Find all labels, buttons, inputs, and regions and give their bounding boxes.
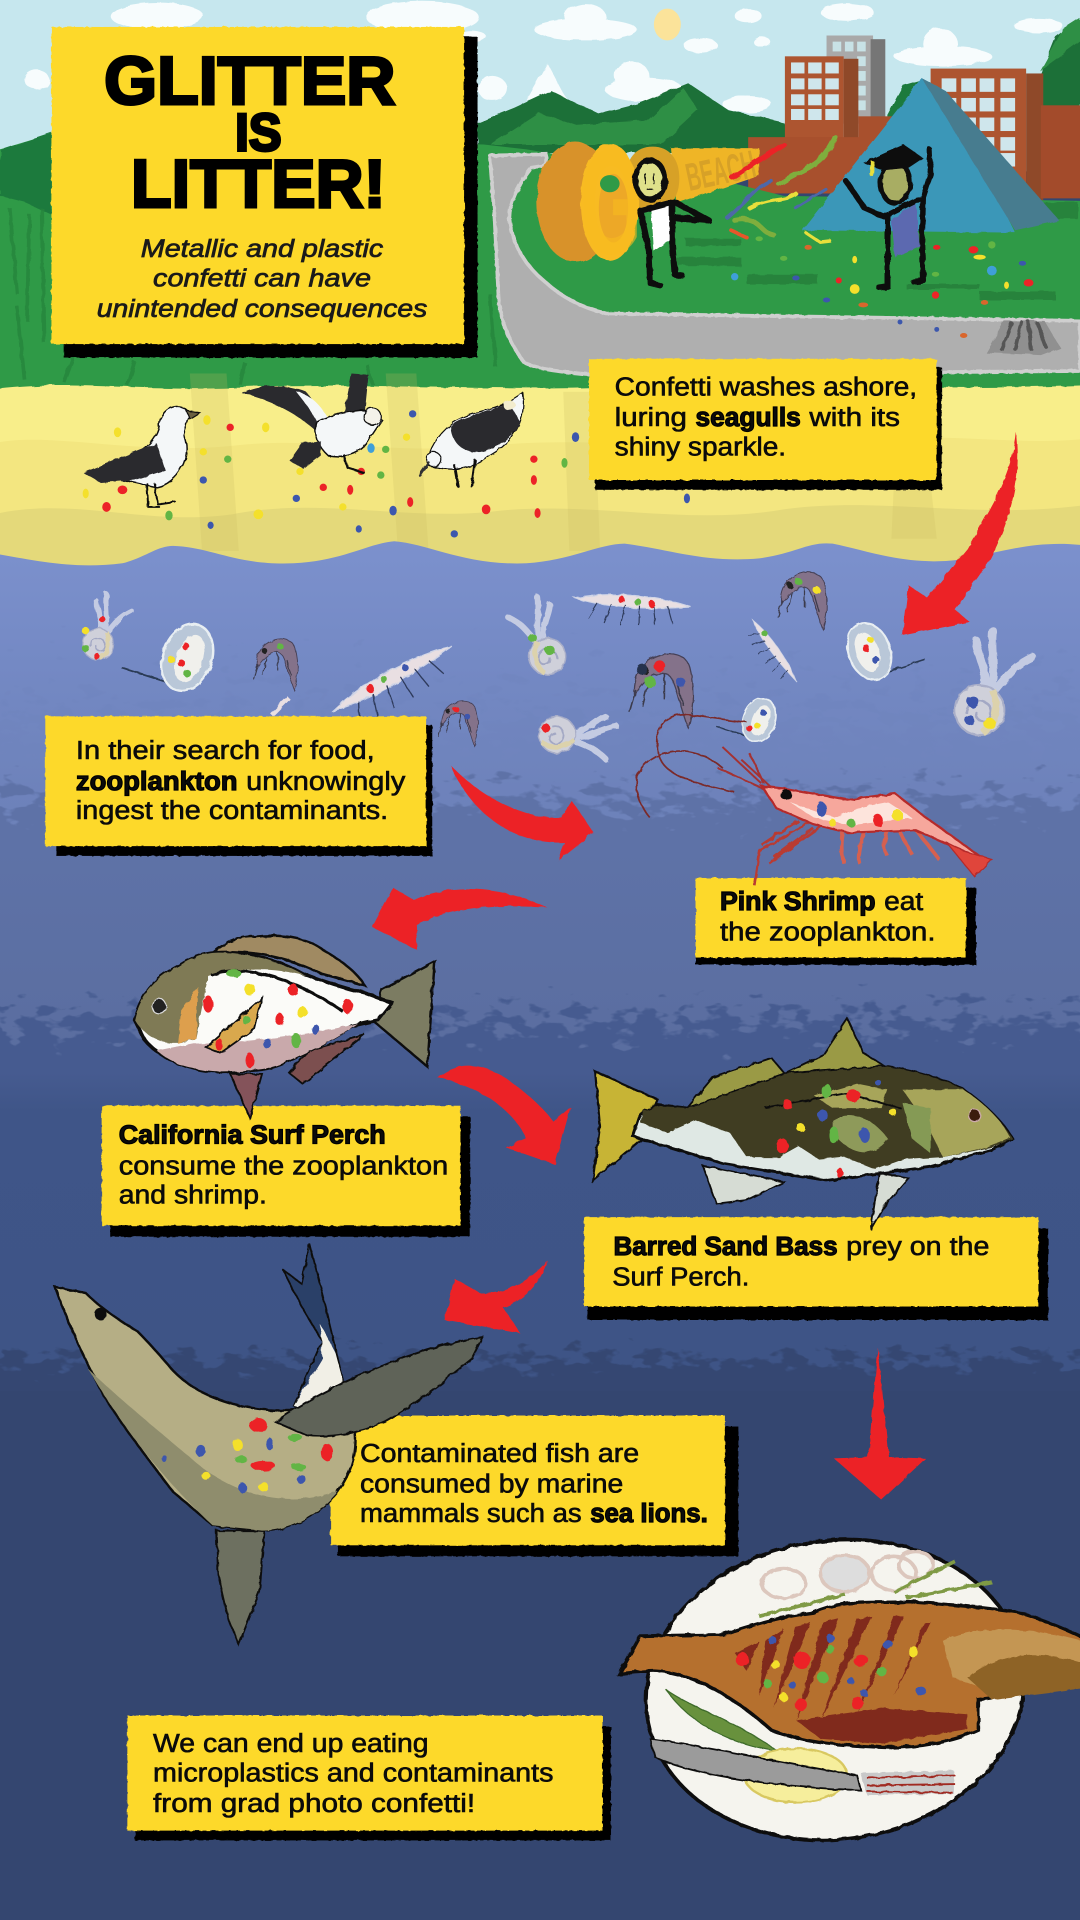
water — [0, 541, 1080, 1920]
rear flipper up — [283, 1244, 345, 1411]
water band 2 solid — [0, 850, 1080, 1073]
arrow: sand to plankton — [902, 432, 1018, 636]
krill 1 — [328, 642, 465, 732]
plate — [626, 1515, 1044, 1864]
water band 4 solid — [0, 1391, 1080, 1920]
person: right stick figure in grad cap — [846, 144, 931, 288]
title: LITTER! — [131, 147, 386, 222]
bass tail — [593, 1071, 658, 1180]
title: IS — [235, 104, 282, 163]
buildings — [748, 36, 1080, 201]
building: grey tower — [827, 36, 885, 125]
callout: zooplankton — [45, 716, 432, 856]
front flipper — [276, 1337, 482, 1436]
arrow: perch to bass — [437, 1066, 571, 1164]
krill 2 — [572, 587, 692, 635]
greens — [666, 1690, 778, 1751]
water mottling 1 — [0, 594, 1080, 851]
small krill fragment — [272, 698, 289, 715]
perch dorsal fin — [213, 936, 365, 986]
bass lower fins — [703, 1166, 784, 1204]
snail plankton 4 — [534, 699, 625, 778]
building: brick right — [931, 69, 1080, 201]
surf perch — [135, 936, 435, 1118]
background: sky — [0, 0, 1080, 171]
callout: humans: microplastics and contaminants — [153, 1760, 553, 1788]
grass background — [0, 135, 1080, 410]
callout: seagulls: Confetti washes ashore, — [615, 374, 917, 402]
callout: sand bass — [584, 1217, 1048, 1320]
callout: zooplankton: unknowingly — [246, 768, 405, 796]
title panel — [51, 27, 478, 358]
arrow: shrimp to perch — [372, 888, 547, 950]
callout: zooplankton: ingest the contaminants. — [76, 797, 388, 825]
road — [490, 154, 1080, 375]
water mottling 3 — [0, 965, 1080, 1075]
oval plankton 1 — [120, 605, 222, 698]
sun — [654, 9, 681, 40]
seagull: pecking — [420, 393, 523, 486]
callout: sand bass: prey on the — [846, 1233, 989, 1261]
subtitle: unintended consequences — [97, 295, 428, 323]
subtitle: Metallic and plastic — [141, 235, 384, 263]
lawn shading stripes — [673, 202, 1078, 300]
title box — [51, 27, 464, 344]
perch pectoral fin — [206, 998, 262, 1053]
tent: blue pyramid — [802, 78, 1059, 233]
zooplankton — [82, 572, 1032, 778]
BEACH letters: BEACH — [682, 143, 760, 200]
callout: sea lions: sea lions. — [590, 1500, 708, 1528]
oval plankton 3 — [716, 686, 782, 746]
arrow: plankton to shrimp — [451, 765, 594, 861]
perch tail — [372, 961, 435, 1067]
perch body — [135, 953, 392, 1072]
big G letter: G — [580, 118, 642, 285]
subtitle — [97, 235, 428, 323]
callout: pink shrimp: the zooplankton. — [720, 918, 936, 946]
bass body — [633, 1067, 1013, 1180]
subtitle: confetti can have — [153, 265, 371, 293]
amphipod 1 — [253, 639, 298, 690]
callout: humans — [127, 1716, 611, 1840]
callout: seagulls — [589, 359, 942, 490]
callout: sea lions: consumed by marine — [360, 1471, 623, 1499]
sand confetti — [83, 410, 690, 538]
perch belly fins — [230, 1074, 262, 1118]
plate of cooked fish — [620, 1515, 1080, 1864]
callout: seagulls: seagulls — [696, 404, 801, 432]
onions — [762, 1551, 933, 1598]
water mottling 4 — [0, 1325, 1080, 1393]
oval plankton 2 — [840, 607, 926, 686]
lawn confetti — [731, 236, 1033, 338]
callout: pink shrimp: eat — [884, 888, 923, 916]
tail flipper down — [217, 1531, 264, 1644]
snail plankton 1 — [82, 594, 131, 660]
callout: surf perch: California Surf Perch — [119, 1122, 386, 1150]
callout: pink shrimp: Pink Shrimp — [720, 888, 876, 916]
callout: surf perch: and shrimp. — [119, 1182, 267, 1210]
title shadow — [64, 37, 478, 358]
callout: sand bass: Surf Perch. — [612, 1264, 749, 1292]
callout: humans: We can end up eating — [153, 1730, 429, 1758]
Go Beach sign — [536, 118, 760, 285]
storm drain — [986, 321, 1060, 355]
person: left stick figure with face — [636, 160, 709, 285]
BEACH backing — [671, 148, 759, 203]
beach sand — [0, 373, 1080, 588]
callout: seagulls: with its — [808, 404, 900, 432]
arrow: bass to plate — [834, 1348, 926, 1500]
shrimp — [636, 715, 992, 885]
callout: surf perch — [102, 1106, 470, 1237]
callout: zooplankton: In their search for food, — [76, 737, 375, 765]
building: brick left — [748, 56, 895, 193]
fork and lemon — [744, 1749, 847, 1802]
title — [104, 44, 396, 222]
sea lion — [55, 1244, 482, 1644]
amphipod 4 — [438, 701, 478, 746]
O letter: O — [624, 131, 681, 227]
big G back — [536, 142, 615, 262]
seagull: flapping — [241, 373, 382, 473]
amphipod 3 — [629, 654, 693, 728]
title: GLITTER — [104, 44, 396, 119]
amphipod 2 — [778, 572, 827, 629]
callout: seagulls: shiny sparkle. — [615, 434, 786, 462]
body — [55, 1287, 356, 1531]
callout: sea lions — [331, 1416, 738, 1556]
big G front — [580, 143, 639, 261]
callout: surf perch: consume the zooplankton — [119, 1152, 448, 1180]
seagull: standing — [83, 406, 200, 507]
snail plankton 2 — [508, 598, 566, 675]
water band 3 solid — [0, 1073, 1080, 1391]
bass dorsal fins — [688, 1058, 785, 1107]
callout: sea lions: mammals such as — [360, 1500, 582, 1528]
callout: zooplankton: zooplankton — [76, 768, 238, 796]
fish — [620, 1602, 1080, 1747]
barred sand bass — [593, 1019, 1013, 1229]
mountains — [478, 18, 1080, 153]
callout: pink shrimp — [696, 878, 976, 965]
krill 3 — [741, 616, 799, 691]
streamers — [727, 137, 835, 242]
snail plankton 3 — [955, 631, 1032, 735]
herbs — [759, 1561, 992, 1616]
water mottling 2 — [0, 744, 1080, 852]
arrow: bass to sea lion — [444, 1260, 547, 1333]
callout: seagulls: luring — [615, 404, 687, 432]
callout: sea lions: Contaminated fish are — [360, 1440, 639, 1468]
callout: sand bass: Barred Sand Bass — [613, 1233, 838, 1261]
clouds — [24, 1, 1063, 113]
callout: humans: from grad photo confetti! — [153, 1790, 475, 1818]
